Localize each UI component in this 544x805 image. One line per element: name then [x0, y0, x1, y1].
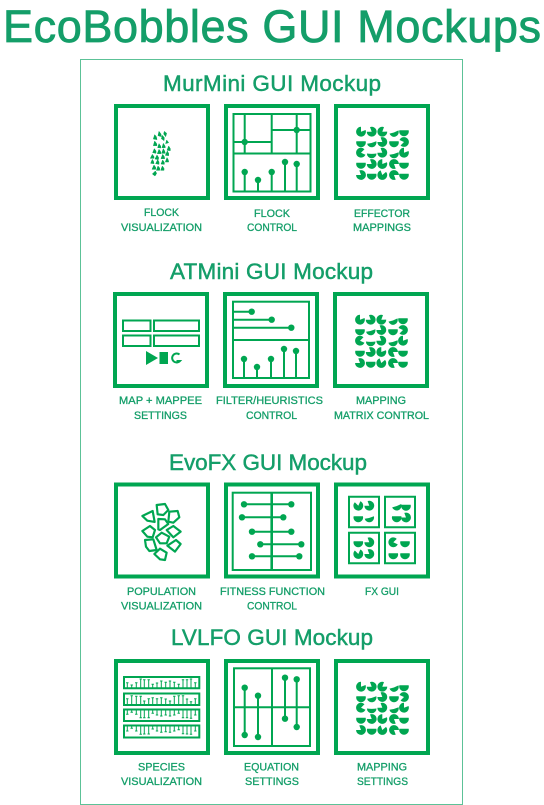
label: flock visualization: VISUALIZATION	[121, 222, 202, 234]
label: flock control	[247, 208, 297, 234]
icon: fx gui	[336, 484, 428, 576]
label: population visualization	[121, 586, 202, 612]
label: mapping settings	[357, 762, 408, 788]
label: population visualization: POPULATION	[127, 586, 196, 598]
icon: species visualization	[116, 661, 208, 753]
icon: population visualization	[116, 484, 208, 576]
label: filter heuristics control: FILTER/HEURISTICS	[216, 395, 323, 407]
label: fx gui: FX GUI	[365, 586, 399, 598]
label: effector mappings: MAPPINGS	[353, 222, 411, 234]
label: fitness function control: FITNESS FUNCTION	[220, 586, 325, 598]
icon: map and mappee settings	[115, 294, 207, 386]
icon: equation settings	[226, 661, 318, 753]
label: map and mappee settings: SETTINGS	[134, 410, 187, 422]
label: species visualization: VISUALIZATION	[121, 776, 202, 788]
label: equation settings: EQUATION	[244, 762, 299, 774]
icon: flock control	[226, 106, 318, 198]
icon: mapping settings	[336, 661, 428, 753]
label: map and mappee settings	[119, 395, 202, 422]
heading: ATMini: ATMini GUI Mockup	[170, 259, 373, 284]
heading: LVLFO: LVLFO GUI Mockup	[171, 625, 373, 650]
label: flock control: FLOCK	[254, 208, 291, 220]
title: EcoBobbles GUI Mockups	[3, 1, 541, 52]
icon: effector mappings	[336, 106, 428, 198]
label: species visualization	[121, 762, 202, 788]
label: mapping matrix control: MATRIX CONTROL	[334, 410, 429, 422]
label: flock control: CONTROL	[247, 222, 297, 234]
label: mapping matrix control	[334, 395, 429, 422]
label: map and mappee settings: MAP + MAPPEE	[119, 395, 202, 407]
panel: mockups container	[80, 60, 462, 804]
label: fitness function control	[220, 586, 325, 612]
label: flock visualization: FLOCK	[144, 207, 180, 219]
icon: fitness function control	[226, 484, 318, 576]
label: mapping settings: MAPPING	[357, 762, 407, 774]
icon: filter heuristics control	[225, 294, 317, 386]
label: equation settings: SETTINGS	[245, 776, 299, 788]
label: species visualization: SPECIES	[138, 762, 185, 774]
label: filter heuristics control	[216, 395, 323, 422]
label: mapping settings: SETTINGS	[357, 776, 408, 788]
label: effector mappings	[353, 208, 411, 234]
heading: MurMini: MurMini GUI Mockup	[163, 71, 381, 96]
label: effector mappings: EFFECTOR	[354, 208, 410, 220]
label: filter heuristics control: CONTROL	[246, 410, 297, 422]
icon: flock visualization	[116, 106, 208, 198]
icon: mapping matrix control	[335, 294, 427, 386]
label: flock visualization	[121, 207, 202, 234]
heading: EvoFX: EvoFX GUI Mockup	[169, 450, 367, 475]
label: mapping matrix control: MAPPING	[356, 395, 406, 407]
label: fitness function control: CONTROL	[247, 600, 297, 612]
label: population visualization: VISUALIZATION	[121, 600, 202, 612]
label: equation settings	[244, 762, 299, 788]
